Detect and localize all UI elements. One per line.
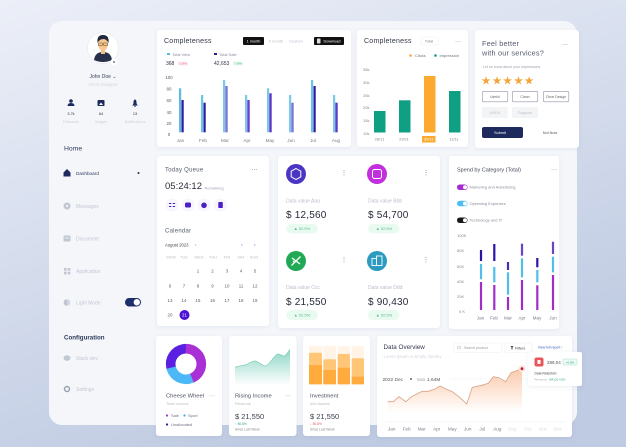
menu dots: ···: [455, 39, 461, 45]
data card: aaa: $ 12,560: [286, 210, 327, 221]
legend: total view: 368: [166, 61, 175, 67]
y axis labels: 25k: [363, 93, 369, 98]
y axis labels: 80K: [457, 248, 464, 253]
y axis labels: 20k: [363, 105, 369, 110]
star rating: ★: [502, 76, 513, 88]
nav: document: [64, 236, 99, 242]
queue icons: [166, 198, 227, 212]
month labels: [177, 138, 341, 143]
panel: completeness clicks and impressions: [357, 30, 468, 147]
y axis labels: 20: [167, 121, 172, 126]
user name: John Doe ⌄: [90, 74, 116, 80]
data card: ccc: ⋮: [340, 257, 348, 264]
panel: data values: [278, 156, 440, 328]
months axis: Jan: [388, 426, 396, 432]
month selector: [165, 242, 256, 248]
menu dots: ···: [551, 167, 557, 173]
y axis labels: 30k: [363, 80, 369, 85]
months axis: Apr: [433, 426, 441, 432]
legend: total sale: [214, 52, 243, 67]
stat: followers: Followers: [63, 120, 79, 124]
months axis: Aug: [493, 426, 502, 432]
month labels: Aug: [332, 138, 341, 143]
nav: stack dev: Stack dev: [76, 356, 98, 362]
detail: Revenue: +$4120 USD: [534, 378, 566, 382]
y axis labels: 40: [167, 110, 172, 115]
stat: notifications: Notifications: [125, 120, 145, 124]
icon: user avatar: [88, 32, 118, 66]
y axis labels: 10k: [363, 131, 369, 136]
calendar grid: 8: [197, 284, 200, 288]
data card: ccc: Data value Ccc: [286, 285, 320, 291]
star rating: ★: [513, 76, 524, 88]
area chart: [235, 349, 290, 385]
panel: feedback form: [475, 30, 579, 148]
stacked bar chart: [481, 242, 553, 310]
calendar grid: 15: [196, 298, 201, 303]
nav: messages: [64, 202, 99, 210]
calendar grid: TUE: [180, 254, 188, 260]
area chart: [388, 365, 528, 412]
calendar grid: [166, 254, 258, 320]
search box: Search product: [464, 346, 488, 350]
y axis labels: 100: [165, 75, 173, 80]
donut chart: [166, 344, 206, 384]
panel: sidebar: [63, 32, 145, 393]
month labels: Jan: [477, 316, 485, 320]
x axis labels: 29/11: [399, 136, 410, 142]
panel: rising income: [229, 336, 296, 436]
heading: Spend by Category (Total): [457, 168, 521, 174]
month labels: Jun: [549, 316, 557, 320]
option buttons: Clear Design: [546, 95, 566, 99]
dropdown: total: Total: [425, 38, 433, 44]
stat: notifications: [125, 100, 145, 124]
icon: red badge: [534, 358, 544, 366]
panel: cheese wheel: [156, 336, 222, 436]
legend: [409, 53, 459, 58]
months axis: Jun: [464, 426, 472, 432]
calendar grid: 2: [211, 269, 214, 274]
star rating: ★: [524, 76, 534, 88]
panel: investment: [303, 336, 370, 436]
months axis: Oct: [524, 426, 532, 432]
calendar grid: WED: [194, 254, 204, 260]
option buttons: Clean: [520, 95, 530, 99]
star rating: ★: [481, 76, 491, 88]
heading: calendar: Calendar: [165, 228, 191, 234]
month labels: Apr: [518, 316, 526, 320]
calendar grid: THU: [209, 254, 217, 260]
nav: dashboard: [64, 169, 140, 176]
value label: 2022 Dec: [382, 377, 404, 383]
calendar grid: 18: [239, 298, 244, 303]
legend: Unallocated: [171, 422, 192, 427]
legend: Impression: [440, 53, 459, 58]
y axis labels: 100K: [457, 233, 467, 238]
star rating: [481, 76, 534, 88]
stat: images: 64: [99, 112, 103, 116]
nav: light mode toggle: [64, 298, 141, 306]
calendar grid: 11: [239, 284, 244, 288]
star rating: ★: [492, 76, 502, 88]
y axis labels: 80: [167, 86, 172, 92]
calendar grid: 12: [253, 284, 258, 288]
month labels: Feb: [490, 316, 498, 320]
option buttons: UI/UX: [490, 110, 501, 115]
y axis labels: [457, 233, 467, 314]
calendar grid: SUN: [250, 254, 258, 260]
data card: ddd: ▲ 52.5%: [376, 312, 393, 318]
legend: Sale: [171, 413, 180, 418]
stat: followers: [63, 99, 79, 124]
legend toggles: [457, 184, 516, 223]
data card: ddd: [367, 251, 430, 320]
countdown: Remaining: [204, 186, 224, 190]
title: Cheese Wheel: [166, 394, 204, 400]
x axis labels: 28/11: [375, 136, 385, 142]
view full report link: View full report ›: [538, 346, 562, 350]
month labels: Jun: [287, 138, 295, 143]
menu dots: ···: [209, 394, 215, 400]
legend toggles: Operating Expenses: [470, 201, 506, 206]
months axis: Dec: [554, 426, 563, 432]
legend: Sport: [188, 413, 198, 418]
change badge: +0.8%: [566, 360, 575, 364]
x axis labels: 30/11: [424, 137, 434, 142]
search box: [454, 343, 502, 352]
data card: ccc: $ 21,550: [286, 297, 327, 308]
data card: ccc: [286, 251, 348, 320]
y axis labels: 60K: [457, 264, 464, 269]
data card: bbb: ⋮: [422, 170, 430, 177]
data card: ccc: ▲ 52.5%: [294, 312, 311, 318]
calendar grid: SAT: [237, 254, 245, 260]
nav: application: [64, 268, 101, 275]
heading: configuration: Configuration: [64, 334, 105, 342]
caption: Since Last Week: [235, 428, 260, 432]
calendar grid: 4: [240, 269, 243, 274]
filters button: [505, 343, 532, 352]
month labels: Apr: [243, 138, 251, 143]
month labels: Jan: [177, 138, 185, 143]
option buttons: Useful: [490, 95, 500, 99]
legend: total view: [166, 52, 190, 67]
not now link: Not Now: [543, 131, 558, 135]
calendar grid: 5: [254, 269, 257, 274]
month labels: Feb: [199, 138, 207, 143]
month labels: [477, 316, 557, 320]
tab: 1 month active: [243, 37, 264, 45]
nav: messages: Messages: [76, 204, 99, 210]
y axis labels: 60: [167, 98, 172, 103]
data card: bbb: $ 54,700: [368, 210, 409, 221]
bar chart: [374, 76, 460, 132]
tab: 1 month active: 1 month: [247, 40, 260, 44]
month labels: Mar: [504, 316, 512, 320]
tab: custom: Custom: [289, 38, 304, 44]
x axis labels: [375, 136, 459, 142]
heading: with our services?: [481, 48, 544, 58]
legend: total sale: 7.08%: [234, 62, 242, 66]
calendar grid: 19: [253, 298, 258, 303]
heading: home: Home: [64, 146, 82, 152]
legend: total view: Total View: [172, 52, 190, 57]
month selector: ›: [195, 242, 197, 248]
countdown: 05:24:12: [165, 181, 202, 192]
calendar grid: 1: [197, 269, 200, 274]
data card: aaa: Data value Aaa: [286, 198, 320, 204]
nav: dashboard: Dashboard: [76, 171, 99, 176]
subtitle: Total Income: [166, 401, 189, 406]
nav: light mode toggle: Light Mode: [76, 300, 101, 306]
y axis labels: 0 K: [459, 309, 465, 314]
title: Investment: [310, 394, 339, 400]
value: $ 21,550: [310, 412, 339, 421]
stat: notifications: 13: [133, 112, 137, 116]
callout: data retention tooltip: [528, 352, 582, 386]
value: $ 21,550: [235, 412, 264, 421]
months axis: Feb: [403, 426, 411, 432]
calendar grid: 16: [210, 298, 215, 303]
data card: aaa: [286, 164, 348, 234]
menu dots: ···: [285, 394, 291, 400]
download button: [314, 37, 344, 45]
heading: Completeness: [164, 38, 212, 45]
calendar grid: 9: [211, 284, 214, 288]
calendar grid: 10: [225, 284, 230, 288]
value label: [382, 377, 440, 383]
calendar grid: 3: [226, 269, 229, 274]
value label: 1.64M: [427, 377, 440, 383]
months axis: [386, 422, 565, 432]
heading: [481, 39, 544, 58]
legend: total sale: 42,653: [214, 61, 230, 67]
calendar grid: 13: [168, 298, 173, 303]
main dashboard panel: [49, 21, 577, 425]
data card: bbb: ▲ 52.5%: [376, 226, 393, 231]
legend toggles: Marketing and Advertising: [470, 185, 516, 190]
heading: Data Overview: [384, 344, 425, 351]
subtitle: Info Assets: [310, 401, 330, 406]
x axis labels: 11/11: [449, 136, 459, 142]
month labels: Jul: [310, 138, 316, 143]
label: Data Retention: [534, 372, 557, 376]
calendar grid: FRI: [224, 254, 230, 260]
month labels: Mar: [221, 138, 229, 143]
submit button: Submit: [494, 131, 507, 135]
y axis labels: 0: [168, 132, 171, 137]
month selector: August 2023: [165, 242, 189, 248]
user role: UI/UX Designer: [88, 82, 118, 87]
data card: bbb: Data value Bbb: [368, 198, 402, 204]
prompt text: Let us know about your impressions: [483, 65, 541, 69]
heading: Today Queue: [165, 168, 204, 174]
y axis labels: 40K: [457, 279, 464, 284]
months axis: Sep: [508, 426, 517, 432]
calendar grid: 17: [225, 298, 230, 303]
data card: ddd: Data value Ddd: [368, 285, 403, 291]
data card: ddd: ⋮: [422, 257, 430, 264]
nav: stack dev: [64, 355, 98, 362]
filters button: Filters: [515, 346, 525, 350]
nav: settings: [64, 386, 95, 393]
menu dots: ···: [562, 42, 568, 48]
stat: images: Images: [95, 120, 107, 124]
value label: SGD: [417, 378, 425, 382]
legend toggles: Technology and IT: [470, 218, 503, 223]
subtitle: Revenue: [235, 401, 252, 406]
download button: Download: [324, 40, 340, 44]
legend: total sale: Total Sale: [219, 52, 237, 57]
calendar grid: 6: [169, 284, 172, 288]
data card: aaa: ⋮: [340, 170, 348, 177]
legend: [166, 413, 198, 427]
months axis: Mar: [418, 426, 426, 432]
nav: application: Application: [76, 269, 101, 275]
tab: 6 month: 6 month: [269, 38, 283, 44]
nav: document: Document: [76, 236, 99, 242]
y axis labels: [165, 75, 173, 137]
nav: settings: Settings: [76, 387, 95, 393]
data card: bbb: [367, 164, 430, 234]
legend: Clicks: [415, 53, 426, 58]
y axis labels: [363, 67, 369, 136]
countdown: [165, 181, 224, 192]
panel: data overview: [377, 336, 572, 437]
stat: images: [95, 100, 107, 124]
caption: Since Last Week: [310, 428, 335, 432]
stat: followers: 3.7k: [67, 112, 75, 116]
change: ↑ 50.8%: [235, 422, 247, 426]
stacked columns: [309, 346, 364, 384]
month labels: May: [533, 316, 542, 320]
value: 289,04: [547, 360, 561, 365]
bar chart: [179, 80, 338, 132]
months axis: May: [448, 426, 457, 432]
legend: total view: 1.08%: [179, 62, 187, 66]
calendar grid: MON: [166, 254, 176, 260]
calendar grid: 21: [182, 313, 187, 318]
y axis labels: 35k: [363, 67, 369, 72]
months axis: Jul: [479, 426, 485, 432]
data card: aaa: ▲ 52.5%: [294, 226, 311, 231]
calendar grid: 14: [182, 298, 187, 303]
month selector: ‹: [241, 242, 243, 248]
y axis labels: 20K: [457, 294, 464, 299]
panel: spend by category: [449, 156, 559, 329]
option buttons: Support: [518, 110, 533, 115]
option buttons: [482, 91, 569, 118]
panel: completeness bars: [157, 30, 351, 147]
change: ↓ 50.8%: [310, 422, 322, 426]
month selector: ›: [254, 242, 256, 248]
subtitle: Lorem Ipsum is simply dummy: [384, 354, 442, 359]
menu dots: ···: [252, 167, 258, 173]
calendar grid: 7: [183, 284, 186, 288]
months axis: Nov: [539, 426, 548, 432]
title: Rising Income: [235, 394, 272, 400]
data card: ddd: $ 90,430: [368, 297, 409, 308]
panel: today queue and calendar: [157, 156, 269, 326]
heading: Completeness: [364, 38, 412, 45]
heading: Feel better: [482, 39, 519, 48]
month labels: May: [266, 138, 275, 143]
calendar grid: 20: [168, 313, 173, 318]
y axis labels: 15k: [363, 118, 369, 123]
